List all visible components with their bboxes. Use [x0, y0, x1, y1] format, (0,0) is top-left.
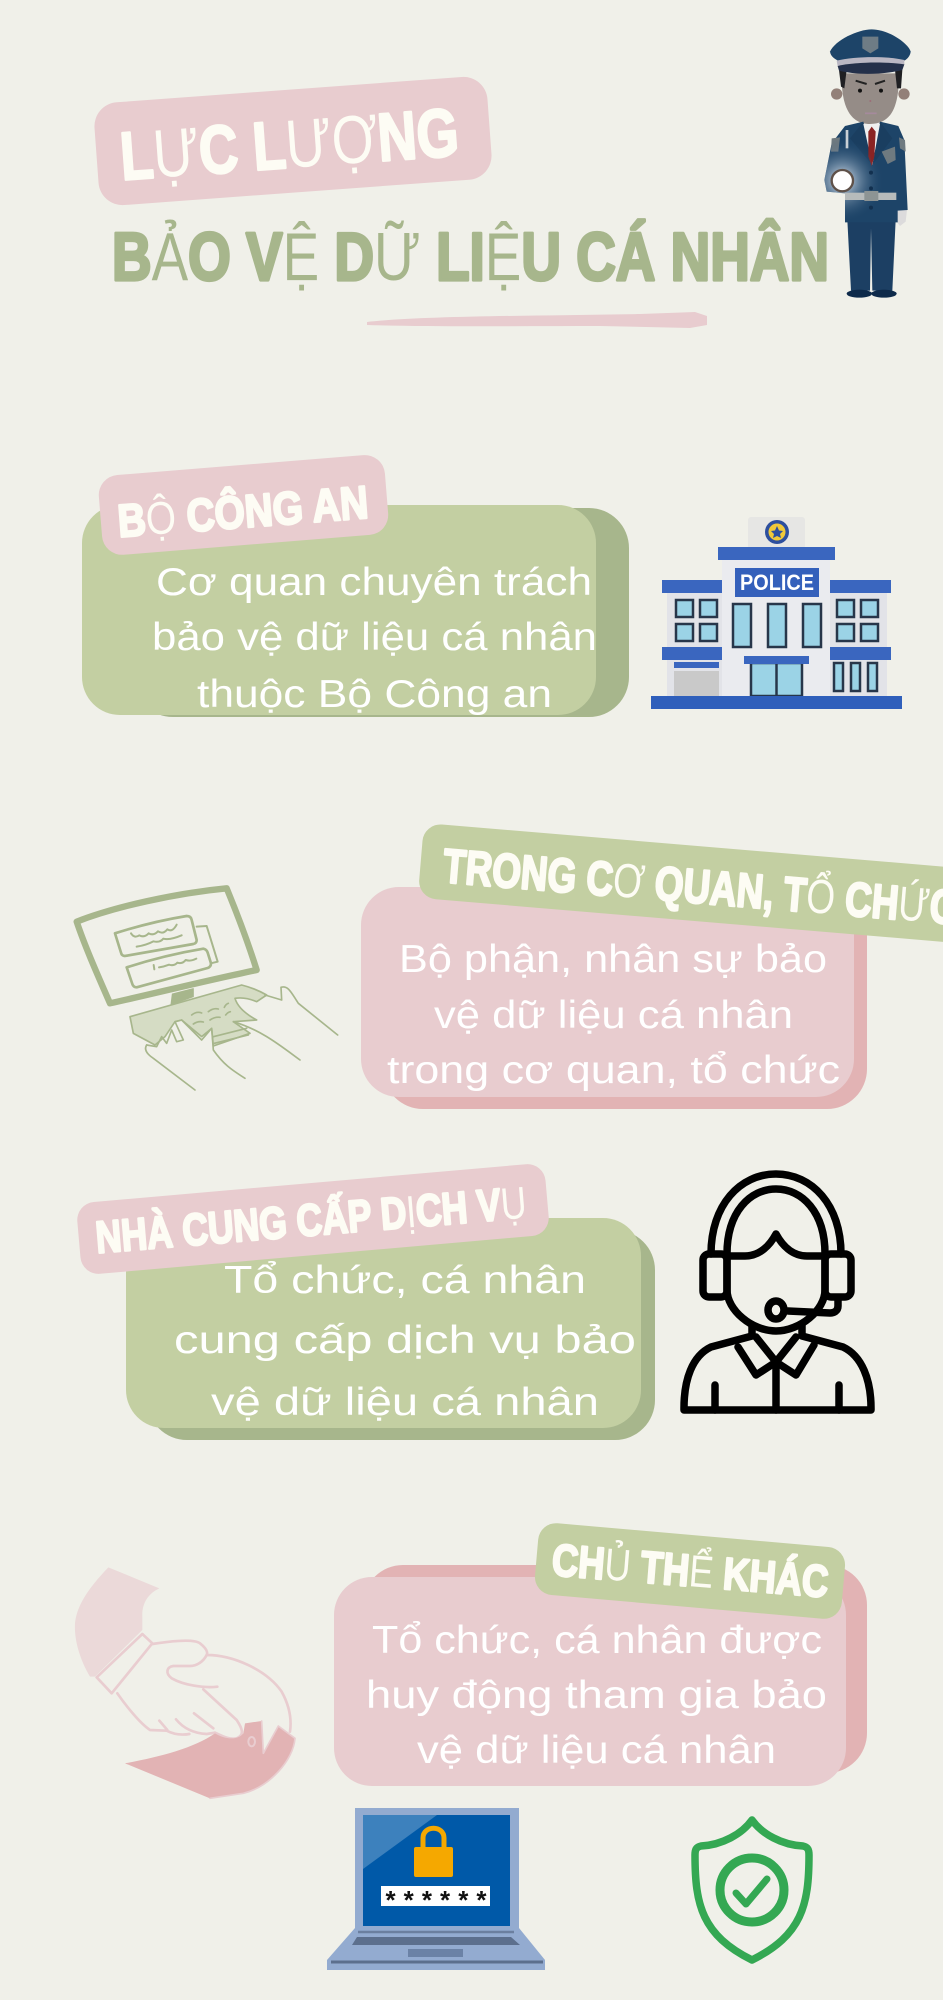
tag: Nhà cung cấp dịch vụ: NHÀ CUNG CẤP DỊCH VỤ [94, 1177, 528, 1263]
panel: Trong cơ quan, tổ chức [361, 823, 943, 1109]
title underline brush stroke [367, 312, 707, 328]
icon: police station building [651, 517, 902, 709]
title text: BẢO VỆ DỮ LIỆU CÁ NHÂN: BẢO VỆ DỮ LIỆU CÁ NHÂN [112, 218, 829, 295]
title block [93, 75, 829, 328]
description text: Tổ chức, cá nhân được [372, 1619, 822, 1662]
icon: computer and typing hands [77, 888, 338, 1090]
description text: Bộ phận, nhân sự bảo [399, 938, 827, 981]
description text: vệ dữ liệu cá nhân [434, 994, 793, 1037]
icon: green security shield with check [695, 1820, 809, 1960]
card body [334, 1577, 846, 1786]
description text: huy động tham gia bảo [366, 1674, 827, 1717]
card body [126, 1218, 641, 1428]
icon: hand passing an item [75, 1567, 295, 1798]
description text: trong cơ quan, tổ chức [387, 1049, 840, 1092]
tag: Bộ Công an: BỘ CÔNG AN [116, 476, 370, 547]
icon: police station building: POLICE [740, 570, 814, 595]
icon: police officer [822, 29, 911, 298]
description text: thuộc Bộ Công an [197, 673, 552, 716]
card shadow [133, 508, 629, 717]
panel: Bộ Công an [82, 454, 629, 717]
card shadow [147, 1230, 655, 1440]
description text [387, 938, 840, 1092]
description text: vệ dữ liệu cá nhân [417, 1729, 776, 1772]
card shadow [363, 1565, 867, 1773]
description text: Cơ quan chuyên trách [156, 561, 592, 604]
description text: cung cấp dịch vụ bảo [174, 1319, 636, 1362]
description text: vệ dữ liệu cá nhân [211, 1381, 599, 1424]
panel: Nhà cung cấp dịch vụ [76, 1163, 655, 1440]
card body [361, 887, 854, 1097]
description text [366, 1619, 827, 1772]
card body [82, 505, 596, 715]
description text: bảo vệ dữ liệu cá nhân [152, 616, 597, 659]
icon: laptop with padlock and password [327, 1808, 545, 1970]
title tag: LỰC LƯỢNG: LỰC LƯỢNG [118, 94, 461, 195]
icon: laptop with padlock and password: ****** [386, 1885, 487, 1915]
tag: Bộ Công an [97, 454, 390, 556]
description text [174, 1259, 636, 1424]
description text: Tổ chức, cá nhân [224, 1259, 586, 1302]
icon: customer support agent with headset [684, 1174, 871, 1410]
card shadow [383, 893, 867, 1109]
tag: Chủ thể khác: CHỦ THỂ KHÁC [550, 1534, 830, 1607]
panel: Chủ thể khác [334, 1522, 867, 1786]
description text [152, 561, 597, 716]
